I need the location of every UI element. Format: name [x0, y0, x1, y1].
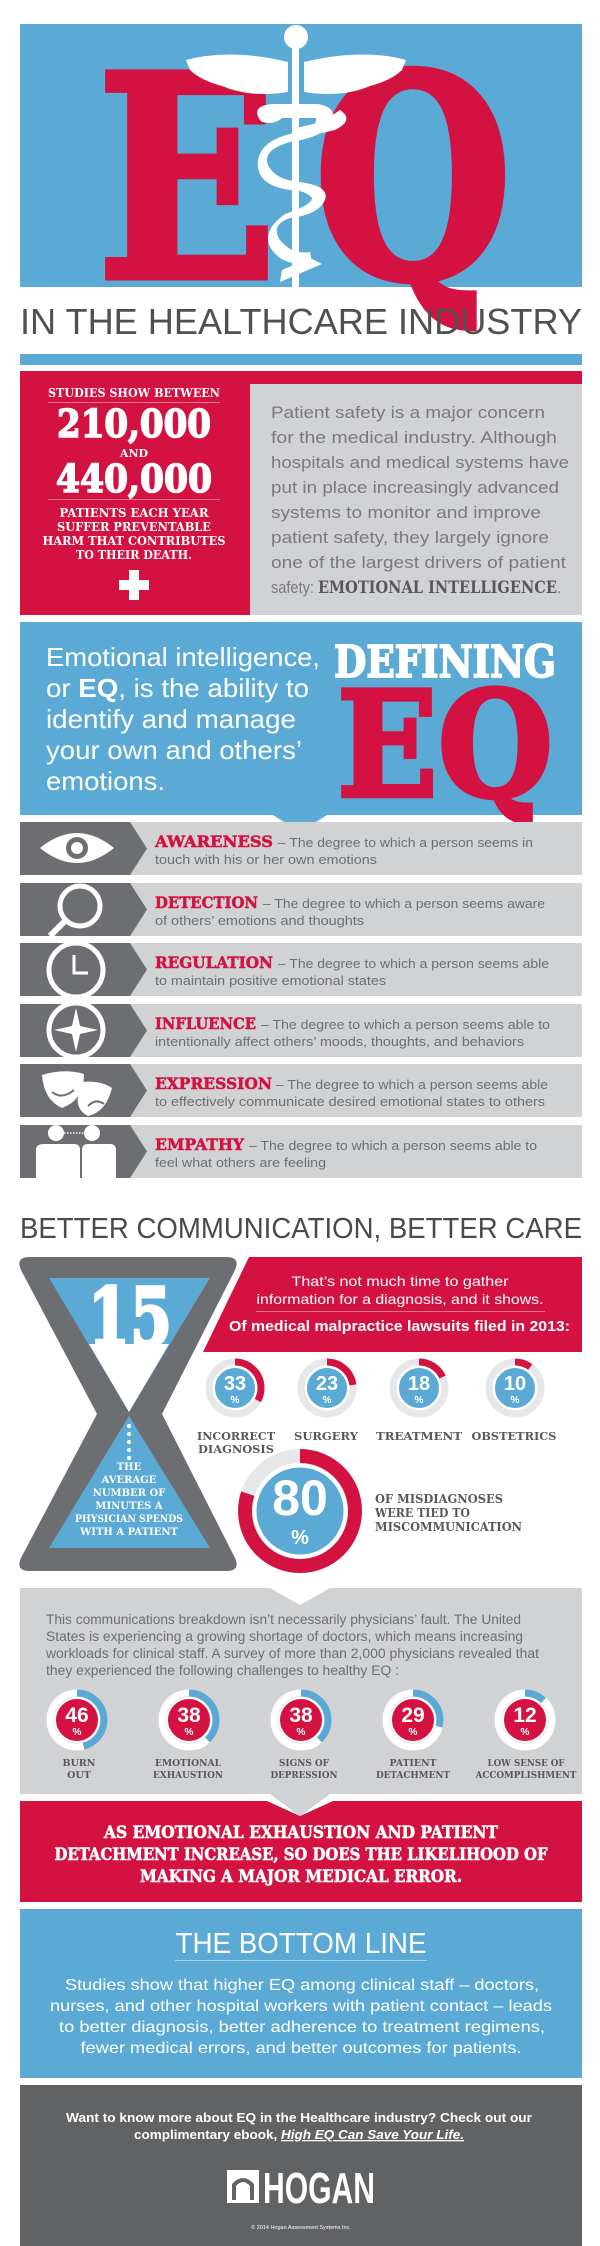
- panel: bottom line: Studies show that higher EQ among clinical staff – doctors,: [65, 1977, 539, 1994]
- row: regulation: to maintain positive emotional states: [155, 974, 386, 988]
- stat text block: STUDIES SHOW BETWEEN: [48, 386, 220, 400]
- heading: DEFINING EQ: EQ: [337, 660, 553, 831]
- chart: challenge donuts: [50, 1693, 552, 1747]
- donut 10%: [489, 1362, 541, 1414]
- row: influence: INFLUENCE: [155, 1014, 256, 1033]
- row: empathy: feel what others are feeling: [155, 1156, 326, 1170]
- chart: challenge donuts: %: [297, 1727, 306, 1738]
- subtitle: IN THE HEALTHCARE INDUSTRY: [20, 301, 582, 342]
- donut 33%: [209, 1362, 261, 1414]
- panel: bottom line: nurses, and other hospital workers with patient contact – leads: [50, 1998, 552, 2015]
- footer: [20, 2085, 582, 2246]
- donut 18%: %: [415, 1395, 424, 1406]
- call to action: Want to know more about EQ in the Healthcare industry? Check out our: [66, 2110, 532, 2125]
- donut labels: INCORRECT: [197, 1430, 276, 1443]
- chart: 80% misdiagnoses: 80: [272, 1470, 328, 1526]
- hourglass: 15 minutes: [19, 1257, 237, 1571]
- donut labels: OBSTETRICS: [472, 1430, 557, 1443]
- header: EQ title block: [20, 15, 582, 344]
- text: patient safety paragraph: Patient safety is a major concern: [271, 403, 545, 422]
- chart: 80% misdiagnoses: [245, 1456, 522, 1566]
- row: detection: DETECTION: [155, 893, 258, 912]
- row: regulation: REGULATION: [155, 953, 273, 972]
- donut labels: SURGERY: [294, 1430, 358, 1443]
- definition text: emotions.: [46, 766, 165, 796]
- row: awareness: touch with his or her own emotions: [155, 853, 377, 867]
- row: influence: – The degree to which a person seems able to: [261, 1018, 550, 1032]
- panel: bottom line: fewer medical errors, and better outcomes for patients.: [80, 2040, 522, 2057]
- icon: caduceus: [186, 25, 406, 290]
- paragraph: States is experiencing a growing shortage of doctors, which means increasing: [46, 1629, 523, 1644]
- row: awareness: AWARENESS: [154, 832, 273, 851]
- callout: medical error warning: MAKING A MAJOR MEDICAL ERROR.: [140, 1867, 462, 1887]
- chart: challenge donuts: %: [185, 1727, 194, 1738]
- row: detection: – The degree to which a person seems aware: [263, 897, 545, 911]
- title letters EQ: Q: [314, 15, 512, 344]
- paragraph: workloads for clinical staff. A survey of more than 2,000 physicians revealed that: [45, 1646, 539, 1661]
- stat text block: [42, 386, 226, 562]
- challenge labels: EXHAUSTION: [153, 1770, 223, 1781]
- row: expression: to effectively communicate desired emotional states to others: [155, 1095, 545, 1109]
- donut labels: [197, 1430, 557, 1456]
- callout: not much time: Of medical malpractice lawsuits filed in 2013:: [229, 1318, 570, 1335]
- text: patient safety paragraph: put in place increasingly advanced: [271, 478, 559, 497]
- chart: 80% misdiagnoses: OF MISDIAGNOSES: [375, 1492, 503, 1506]
- row: expression: [20, 1064, 582, 1117]
- chart: challenge donuts: %: [409, 1727, 418, 1738]
- chart: 80% misdiagnoses: WERE TIED TO: [374, 1506, 470, 1520]
- panel: defining EQ: [20, 622, 582, 832]
- challenge labels: OUT: [67, 1770, 91, 1781]
- hourglass: 15 minutes: PHYSICIAN SPENDS: [75, 1514, 183, 1525]
- chart: challenge donuts: 12: [513, 1704, 537, 1727]
- stat text block: AND: [119, 447, 149, 460]
- chart: 80% misdiagnoses: %: [291, 1527, 309, 1549]
- call to action: complimentary ebook, High EQ Can Save Your Life.: [134, 2127, 464, 2142]
- hourglass: 15 minutes: 15: [88, 1270, 172, 1364]
- donut labels: DIAGNOSIS: [198, 1443, 274, 1456]
- chart: challenge donuts: %: [73, 1727, 82, 1738]
- hourglass: 15 minutes: WITH A PATIENT: [79, 1527, 178, 1538]
- row: influence: [20, 1003, 582, 1057]
- stat text block: 210,000: [57, 401, 211, 446]
- title letters EQ: [97, 15, 512, 344]
- challenge labels: SIGNS OF: [279, 1758, 329, 1769]
- text: patient safety paragraph: hospitals and medical systems have: [271, 453, 569, 472]
- donut 23%: 23: [316, 1373, 338, 1395]
- row: empathy: – The degree to which a person seems able to: [249, 1139, 537, 1153]
- chart: challenge donuts: 38: [177, 1704, 201, 1727]
- definition text: Emotional intelligence,: [46, 642, 320, 672]
- challenge labels: [63, 1758, 576, 1781]
- challenge labels: DETACHMENT: [376, 1770, 450, 1781]
- hourglass: 15 minutes: THE: [117, 1462, 142, 1473]
- call to action: [66, 2110, 532, 2142]
- row: expression: EXPRESSION: [155, 1074, 272, 1093]
- donut labels: TREATMENT: [376, 1430, 463, 1443]
- donut 23%: [301, 1362, 353, 1414]
- stat text block: SUFFER PREVENTABLE: [57, 520, 211, 534]
- definition text: your own and others’: [46, 735, 302, 765]
- challenge labels: DEPRESSION: [270, 1770, 338, 1781]
- challenge labels: BURN: [63, 1758, 96, 1769]
- row: expression: – The degree to which a person seems able: [276, 1078, 548, 1092]
- row: detection: of others’ emotions and thoughts: [155, 914, 364, 928]
- paragraph: [45, 1612, 539, 1678]
- row: empathy: [20, 1125, 582, 1178]
- callout: medical error warning: AS EMOTIONAL EXHAUSTION AND PATIENT: [103, 1823, 498, 1843]
- stat text block: 440,000: [56, 456, 212, 501]
- donut 10%: %: [511, 1395, 520, 1406]
- challenge labels: EMOTIONAL: [155, 1758, 221, 1769]
- definition text: or EQ, is the ability to: [46, 673, 309, 703]
- logo: Hogan: HOGAN: [263, 2164, 375, 2213]
- donut 33%: %: [231, 1395, 240, 1406]
- chart: challenge donuts: 29: [401, 1704, 425, 1727]
- row: influence: intentionally affect others’ moods, thoughts, and behaviors: [155, 1035, 524, 1049]
- hourglass: 15 minutes: NUMBER OF: [93, 1488, 165, 1499]
- panel: bottom line: [20, 1909, 582, 2078]
- panel: bottom line: to better diagnosis, better adherence to treatment regimens,: [59, 2019, 545, 2036]
- chart: challenge donuts: 38: [289, 1704, 313, 1727]
- definition text: identify and manage: [46, 704, 296, 734]
- callout: not much time: information for a diagnosis, and it shows.: [256, 1291, 544, 1307]
- donut 33%: 33: [224, 1373, 246, 1395]
- donut 23%: %: [323, 1395, 332, 1406]
- challenge labels: PATIENT: [390, 1758, 436, 1769]
- donut 18%: 18: [408, 1373, 430, 1395]
- donut 18%: [393, 1362, 445, 1414]
- text: patient safety paragraph: safety: EMOTIONAL INTELLIGENCE.: [271, 578, 561, 598]
- stat text block: TO THEIR DEATH.: [76, 548, 192, 562]
- chart: challenge donuts: 46: [65, 1704, 89, 1727]
- row: detection: [20, 883, 582, 936]
- title letters EQ: E: [97, 15, 277, 344]
- icon: medical cross: [119, 570, 149, 600]
- list: EQ dimensions: [20, 822, 582, 1178]
- panel: physician challenges: [20, 1588, 582, 1816]
- definition text: [46, 642, 320, 796]
- chart: lawsuit donuts: [197, 1362, 557, 1456]
- paragraph: This communications breakdown isn’t necessarily physicians’ fault. The United: [46, 1612, 521, 1627]
- callout: not much time: That’s not much time to gather: [292, 1273, 509, 1289]
- callout: not much time: [203, 1257, 582, 1352]
- panel: statistics: [20, 371, 582, 615]
- row: awareness: – The degree to which a person seems in: [278, 836, 533, 850]
- heading: better communication: BETTER COMMUNICATION, BETTER CARE: [20, 1213, 582, 1245]
- text: patient safety paragraph: [271, 403, 569, 598]
- callout: medical error warning: [20, 1794, 582, 1902]
- text: patient safety paragraph: patient safety, they largely ignore: [271, 528, 549, 547]
- row: regulation: – The degree to which a person seems able: [278, 957, 549, 971]
- hourglass: 15 minutes: MINUTES A: [95, 1501, 163, 1512]
- hourglass: 15 minutes: AVERAGE: [101, 1475, 157, 1486]
- chart: 80% misdiagnoses: MISCOMMUNICATION: [375, 1520, 522, 1534]
- challenge labels: ACCOMPLISHMENT: [475, 1770, 576, 1781]
- stat text block: PATIENTS EACH YEAR: [60, 506, 209, 520]
- row: regulation: [20, 943, 582, 997]
- row: awareness: [20, 822, 582, 875]
- text: patient safety paragraph: one of the largest drivers of patient: [271, 553, 566, 572]
- stat text block: HARM THAT CONTRIBUTES: [42, 534, 226, 548]
- footer: © 2014 Hogan Assessment Systems Inc.: [251, 2224, 351, 2231]
- row: empathy: EMPATHY: [155, 1135, 245, 1154]
- text: patient safety paragraph: for the medical industry. Although: [271, 428, 557, 447]
- challenge labels: LOW SENSE OF: [488, 1758, 565, 1769]
- panel: bottom line: THE BOTTOM LINE: [176, 1928, 426, 1960]
- text: patient safety paragraph: systems to monitor and improve: [271, 503, 541, 522]
- logo: Hogan: [227, 2164, 375, 2213]
- paragraph: they experienced the following challenges to healthy EQ :: [46, 1663, 399, 1678]
- chart: challenge donuts: %: [521, 1727, 530, 1738]
- heading: DEFINING EQ: DEFINING: [334, 637, 556, 688]
- donut 10%: 10: [504, 1373, 526, 1395]
